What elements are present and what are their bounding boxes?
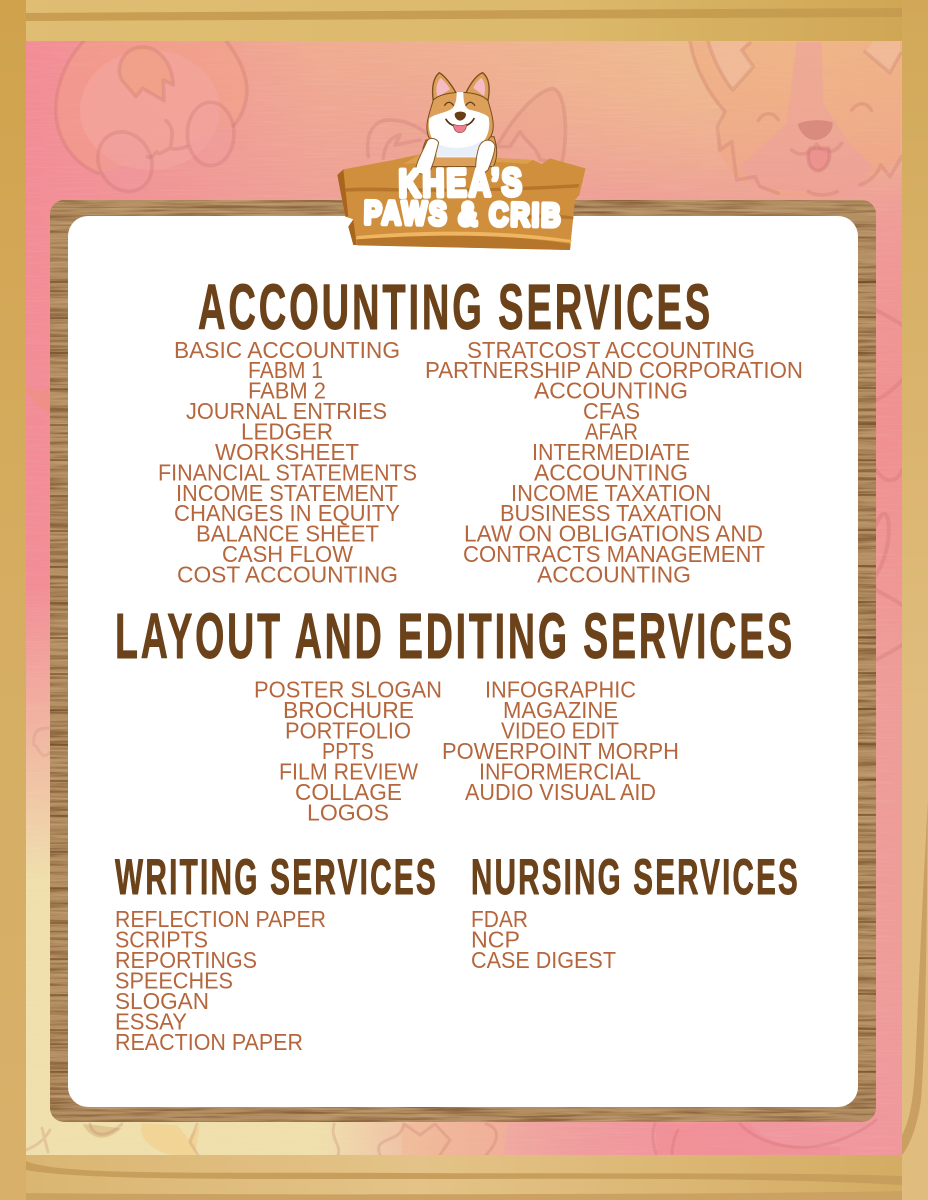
list: accounting services left column: CHANGES IN EQUITY <box>174 500 400 526</box>
logo text: KHEA’S <box>398 161 524 206</box>
list: accounting services right column: CONTRACTS MANAGEMENT <box>463 541 765 567</box>
list: accounting services left column: BASIC ACCOUNTING <box>174 337 400 363</box>
list: layout and editing left column: BROCHURE <box>283 697 414 723</box>
list: layout and editing left column: PPTS <box>322 738 374 764</box>
list: nursing services: CASE DIGEST <box>471 947 616 973</box>
list: accounting services right column: STRATCOST ACCOUNTING <box>467 337 755 363</box>
list: accounting services right column: PARTNERSHIP AND CORPORATION <box>425 357 803 383</box>
list: writing services: ESSAY <box>115 1008 187 1034</box>
list: accounting services left column: LEDGER <box>241 418 333 444</box>
list: nursing services: FDAR <box>471 906 528 932</box>
list: accounting services right column: BUSINESS TAXATION <box>500 500 722 526</box>
corgi illustration <box>416 73 497 174</box>
right wooden frame strip <box>902 0 928 1200</box>
sign: wooden plank <box>337 154 586 250</box>
list: layout and editing right column <box>442 677 679 805</box>
list: accounting services right column: ACCOUNTING <box>534 378 688 404</box>
list: layout and editing left column: COLLAGE <box>295 779 402 805</box>
left wooden frame strip <box>0 0 26 1200</box>
list: accounting services right column: CFAS <box>583 398 640 424</box>
list: accounting services right column: ACCOUNTING <box>534 459 688 485</box>
list: accounting services left column: WORKSHEET <box>215 439 359 465</box>
list: layout and editing left column: PORTFOLIO <box>285 718 411 744</box>
white content panel <box>68 216 858 1107</box>
list: layout and editing right column: VIDEO EDIT <box>501 718 619 744</box>
list: accounting services left column: FABM 2 <box>248 378 326 404</box>
list: accounting services left column <box>158 337 417 588</box>
heading: writing services: WRITING SERVICES <box>115 849 438 905</box>
list: layout and editing right column: AUDIO VISUAL AID <box>465 779 656 805</box>
watermark: outline strokes along the bottom edge <box>26 1120 876 1155</box>
list: layout and editing right column: MAGAZINE <box>503 697 618 723</box>
list: accounting services right column: INCOME TAXATION <box>511 480 711 506</box>
list: accounting services left column: COST ACCOUNTING <box>177 562 398 588</box>
list: accounting services left column: JOURNAL ENTRIES <box>186 398 387 424</box>
list: nursing services: NCP <box>471 926 520 952</box>
list: writing services: SPEECHES <box>115 967 233 993</box>
list: layout and editing right column: POWERPOINT MORPH <box>442 738 679 764</box>
list: writing services: REFLECTION PAPER <box>115 906 326 932</box>
list: accounting services left column: INCOME STATEMENT <box>176 480 398 506</box>
list: layout and editing left column <box>254 677 442 825</box>
wooden board <box>50 200 876 1122</box>
top wooden frame bar <box>0 0 928 41</box>
list: accounting services right column: ACCOUNTING <box>537 562 691 588</box>
list: accounting services right column: INTERMEDIATE <box>532 439 690 465</box>
list: accounting services left column: CASH FLOW <box>222 541 353 567</box>
logo text <box>364 161 563 233</box>
list: writing services: SLOGAN <box>115 988 209 1014</box>
watermark: paw illustration top left <box>56 42 247 201</box>
list: layout and editing right column: INFOGRAPHIC <box>485 677 636 703</box>
logo text: PAWS & CRIB <box>364 194 563 233</box>
bottom wooden frame bar <box>26 1155 902 1200</box>
list: writing services <box>115 906 326 1055</box>
list: layout and editing left column: FILM REVIEW <box>279 758 418 784</box>
list: writing services: SCRIPTS <box>115 926 208 952</box>
list: writing services: REACTION PAPER <box>115 1029 303 1055</box>
list: nursing services <box>471 906 616 973</box>
watermark: dog shapes along the bottom edge <box>83 1124 507 1155</box>
list: layout and editing left column: POSTER SLOGAN <box>254 677 442 703</box>
list: layout and editing left column: LOGOS <box>307 799 389 825</box>
list: accounting services right column <box>425 337 803 588</box>
list: accounting services left column: FINANCIAL STATEMENTS <box>158 459 417 485</box>
watermark: ears behind logo <box>368 88 565 163</box>
list: accounting services right column: AFAR <box>585 418 638 444</box>
logo: corgi and wooden sign <box>337 73 586 250</box>
watermark: smiling dog face top right <box>690 42 903 197</box>
watermark: faint shapes on the side margins <box>26 310 902 756</box>
list: accounting services right column: LAW ON OBLIGATIONS AND <box>464 521 763 547</box>
list: writing services: REPORTINGS <box>115 947 257 973</box>
list: accounting services left column: BALANCE SHEET <box>196 521 379 547</box>
list: accounting services left column: FABM 1 <box>248 357 323 383</box>
list: layout and editing right column: INFORMERCIAL <box>479 758 641 784</box>
